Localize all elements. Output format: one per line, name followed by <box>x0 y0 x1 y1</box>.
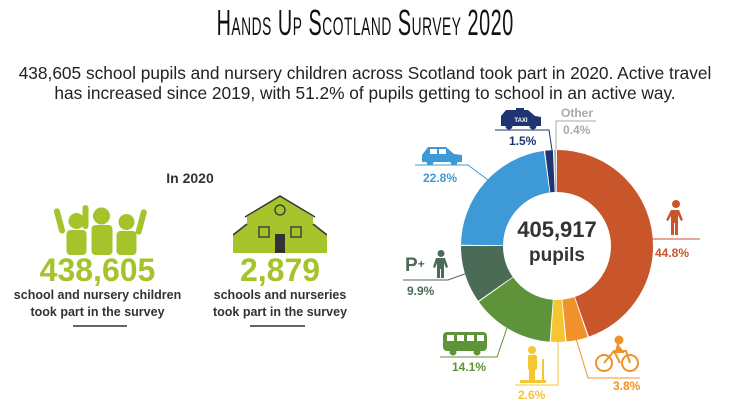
stat label: school and nursery children <box>14 288 181 302</box>
label: bus <box>443 332 487 374</box>
subtitle text <box>19 63 711 103</box>
subtitle text: has increased since 2019, with 51.2% of pupils getting to school in an active way. <box>54 83 676 103</box>
label: car: 22.8% <box>423 171 457 185</box>
label: taxi: TAXI <box>514 118 528 124</box>
label: scooter <box>518 346 546 402</box>
heading: In 2020: In 2020 <box>166 170 214 186</box>
stat label: took part in the survey <box>30 305 165 319</box>
stat label: took part in the survey <box>213 305 347 319</box>
label: park and stride: 9.9% <box>407 284 434 298</box>
label: cycle: 3.8% <box>613 379 640 393</box>
subtitle text: 438,605 school pupils and nursery children across Scotland took part in 2020. Active travel <box>19 63 711 83</box>
label: other <box>561 106 593 137</box>
panel: schools <box>213 195 347 319</box>
label: park and stride <box>405 250 448 298</box>
panel: pupils <box>14 205 181 319</box>
label: car <box>422 147 462 185</box>
label: other: 0.4% <box>563 123 590 137</box>
icon: children <box>54 205 147 255</box>
stat number: 2,879 <box>240 252 320 288</box>
stat label <box>213 288 347 319</box>
label: park and stride: P+ <box>405 255 425 276</box>
label: taxi: 1.5% <box>509 134 536 148</box>
leader lines <box>403 121 700 385</box>
icon: school <box>233 195 327 253</box>
label: other: Other <box>561 106 593 120</box>
title: Hands Up Scotland Survey 2020 <box>216 2 514 43</box>
label: cycle <box>595 336 640 393</box>
label: scooter: 2.6% <box>518 388 545 402</box>
stat number: 438,605 <box>40 252 155 288</box>
stat label <box>14 288 181 319</box>
label: taxi <box>501 108 541 148</box>
label: walk <box>655 200 689 260</box>
label: walk: 44.8% <box>655 246 689 260</box>
donut centre label: 405,917 <box>517 217 597 242</box>
stat label: schools and nurseries <box>214 288 346 302</box>
donut centre label <box>517 217 597 266</box>
label: bus: 14.1% <box>452 360 486 374</box>
donut centre label: pupils <box>529 245 585 266</box>
